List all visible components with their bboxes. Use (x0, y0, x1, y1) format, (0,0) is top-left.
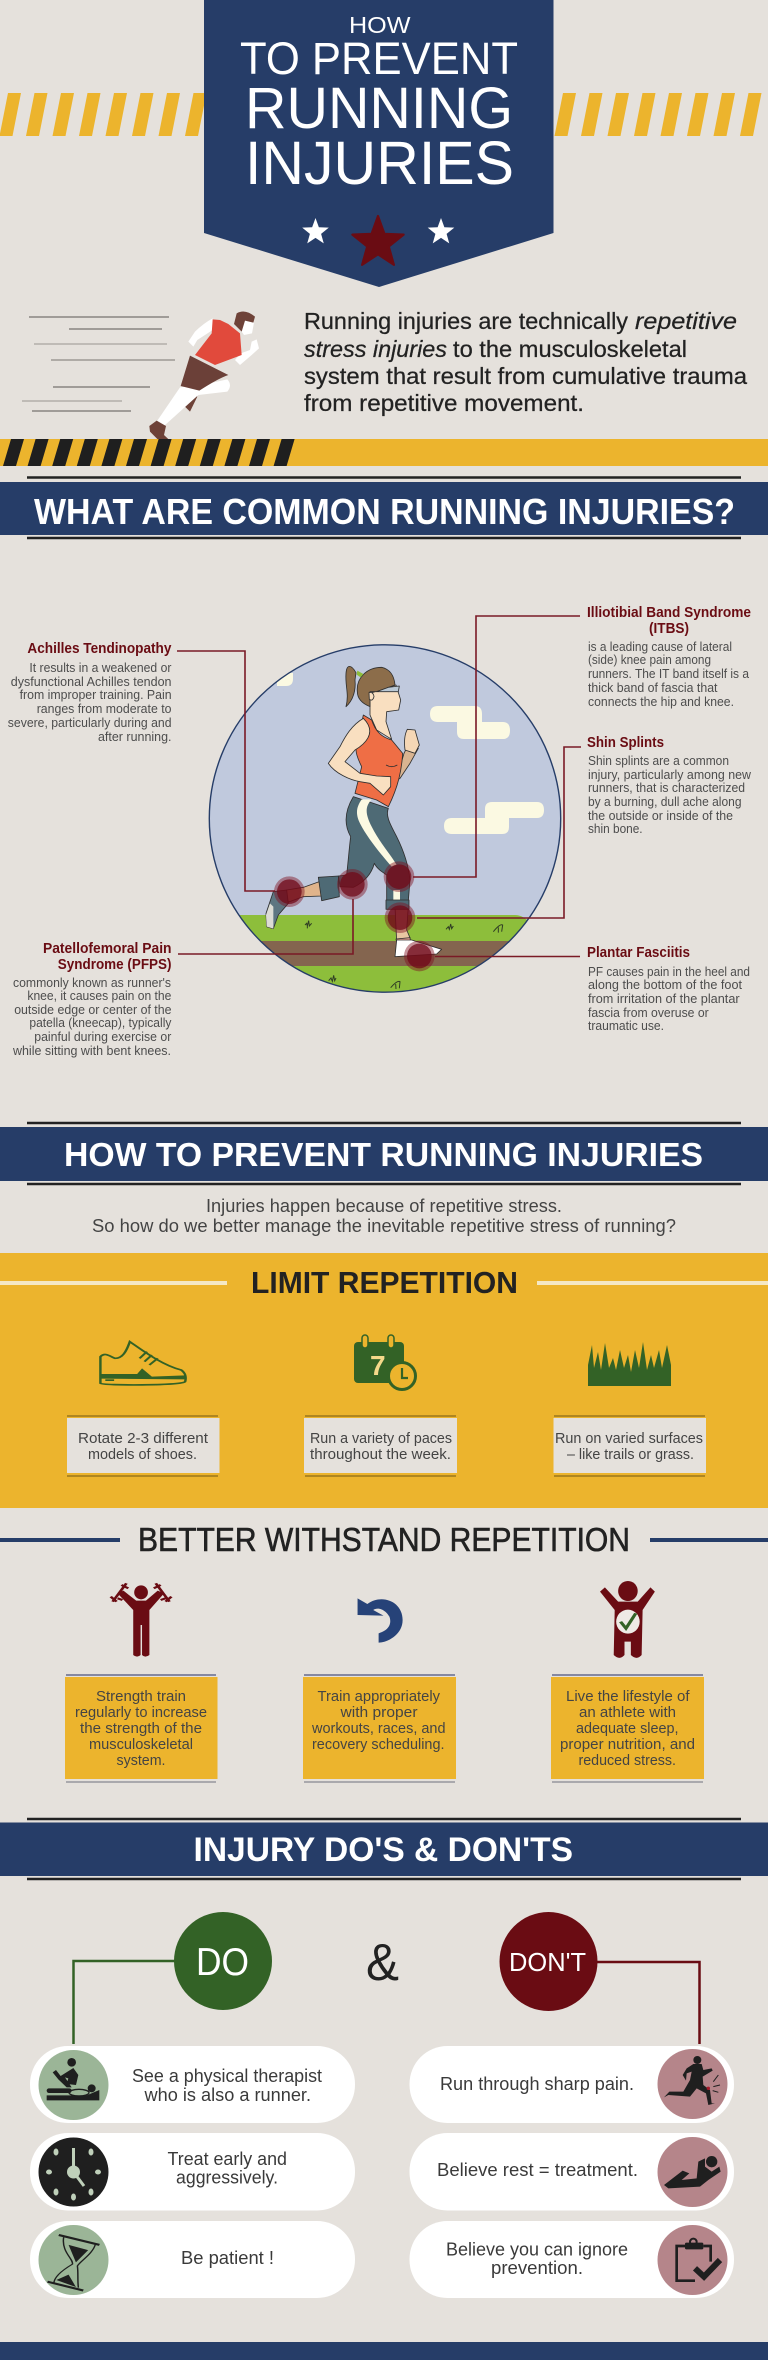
tip: vary surfaces: – like trails or grass. (567, 1446, 694, 1463)
tip: train appropriately: recovery scheduling. (312, 1736, 444, 1753)
tip: rotate shoes: Rotate 2-3 different (78, 1430, 209, 1447)
do item: treat early (30, 2133, 355, 2210)
callout: Achilles Tendinopathy: after running. (98, 730, 172, 744)
DO badge (74, 1912, 272, 2044)
icon: running shoe (100, 1342, 186, 1385)
callout: Patellofemoral Pain Syndrome: while sitting with bent knees. (12, 1044, 171, 1058)
better withstand heading: BETTER WITHSTAND REPETITION (138, 1521, 630, 1558)
tip: train appropriately: with proper (339, 1704, 418, 1721)
callout: Illiotibial Band Syndrome (413, 604, 751, 877)
tip: athlete lifestyle: an athlete with (579, 1704, 676, 1721)
icon: resting person (664, 2156, 721, 2188)
callout: Achilles Tendinopathy: ranges from moderate to (37, 702, 172, 716)
callout: Patellofemoral Pain Syndrome: outside edge or center of the (14, 1003, 172, 1017)
don't item: believe rest: Believe rest = treatment. (437, 2160, 638, 2180)
runner with speed lines (22, 311, 259, 440)
tip: athlete lifestyle: adequate sleep, (576, 1720, 678, 1737)
callout: Plantar Fasciitis: from irritation of the plantar (588, 992, 740, 1006)
tip: strength train: system. (116, 1752, 166, 1769)
callout: Achilles Tendinopathy: It results in a weakened or (29, 661, 171, 675)
title text (240, 12, 518, 197)
do item: be patient: Be patient ! (181, 2248, 274, 2268)
footer band (0, 2342, 768, 2360)
icon: person lifting dumbbells (111, 1583, 171, 1657)
callout: Illiotibial Band Syndrome: Illiotibial Band Syndrome (587, 604, 751, 621)
title text: INJURIES (245, 129, 514, 197)
callout: Achilles Tendinopathy: Achilles Tendinopathy (27, 640, 172, 657)
callout: Patellofemoral Pain Syndrome (12, 899, 353, 1058)
callout: Shin Splints (417, 734, 752, 918)
tip: vary surfaces (554, 1416, 706, 1476)
prevention intro text: So how do we better manage the inevitable repetitive stress of running? (92, 1216, 676, 1236)
panel: limit repetition (0, 1253, 768, 1508)
do item: treat early: Treat early and (168, 2149, 287, 2169)
callout: Shin Splints: the outside or inside of the (588, 809, 733, 823)
section heading: how to prevent running injuries: HOW TO PREVENT RUNNING INJURIES (64, 1136, 703, 1173)
callout: Plantar Fasciitis: Plantar Fasciitis (587, 944, 690, 961)
do item: treat early: aggressively. (176, 2168, 278, 2188)
icon: calendar with clock (354, 1335, 416, 1390)
limit repetition heading (0, 1265, 768, 1300)
callout: Patellofemoral Pain Syndrome: commonly known as runner's (13, 976, 171, 990)
title banner (204, 0, 554, 287)
callout: Patellofemoral Pain Syndrome: Syndrome (PFPS) (58, 956, 172, 973)
callout: Illiotibial Band Syndrome: thick band of fascia that (588, 681, 718, 695)
callout: Shin Splints: Shin splints are a common (588, 754, 729, 768)
tip: athlete lifestyle (551, 1675, 704, 1782)
hazard bar (0, 439, 768, 466)
DO badge: DO (196, 1941, 249, 1984)
title text: HOW (349, 12, 411, 38)
tip: strength train: musculoskeletal (89, 1736, 193, 1753)
tip: vary paces: Run a variety of paces (310, 1430, 452, 1447)
do item: be patient (30, 2221, 355, 2298)
DON'T badge: DON'T (509, 1947, 586, 1977)
prevention intro text (92, 1196, 676, 1236)
panel: better withstand repetition (0, 1521, 768, 1782)
woman figure (266, 666, 442, 957)
callout: Plantar Fasciitis: traumatic use. (588, 1019, 664, 1033)
callout: Patellofemoral Pain Syndrome: knee, it causes pain on the (27, 989, 171, 1003)
tip: train appropriately: Train appropriately (318, 1688, 440, 1705)
icon: clipboard with check (677, 2239, 720, 2281)
intro paragraph: to the musculoskeletal (453, 336, 687, 362)
callout: Illiotibial Band Syndrome: (ITBS) (649, 620, 689, 637)
callout: Patellofemoral Pain Syndrome: Patellofemoral Pain (43, 940, 172, 957)
tip: train appropriately: workouts, races, and (311, 1720, 446, 1737)
tip: strength train: the strength of the (80, 1720, 202, 1737)
don't item: ignore prevention: prevention. (491, 2258, 583, 2278)
tip: strength train: regularly to increase (75, 1704, 207, 1721)
callout: Achilles Tendinopathy: from improper training. Pain (20, 688, 172, 702)
intro paragraph: Running injuries are technically (304, 308, 629, 334)
do item: see a physical therapist: who is also a runner. (143, 2085, 311, 2105)
callout: Plantar Fasciitis (435, 944, 750, 1033)
pain points (274, 861, 435, 971)
grass tufts (305, 921, 503, 989)
don't item: ignore prevention: Believe you can ignore (446, 2240, 628, 2260)
icon: circular arrow (358, 1598, 403, 1643)
icon: hourglass (48, 2235, 99, 2290)
ampersand: & (366, 1934, 399, 1992)
callout: Shin Splints: shin bone. (588, 822, 643, 836)
don't item: ignore prevention (410, 2221, 734, 2298)
do item: see a physical therapist (30, 2046, 355, 2123)
tip: vary paces (304, 1416, 457, 1476)
tip: vary paces: throughout the week. (310, 1446, 451, 1463)
yellow hazard stripes: left (0, 93, 206, 136)
tip: rotate shoes (67, 1416, 220, 1476)
tip: vary surfaces: Run on varied surfaces (555, 1430, 703, 1447)
callout: Shin Splints: runners, that is characterized (588, 781, 745, 795)
intro paragraph (304, 308, 747, 416)
intro paragraph: from repetitive movement. (304, 390, 584, 416)
tip: train appropriately (303, 1675, 456, 1782)
title text: TO PREVENT (240, 33, 518, 84)
DON'T badge (500, 1912, 700, 2044)
illustration: woman running in a circle with pain points (200, 645, 561, 1000)
tip: strength train (65, 1675, 218, 1782)
icon: physical therapist (47, 2058, 99, 2100)
do item: see a physical therapist: See a physical therapist (132, 2066, 322, 2086)
intro paragraph: system that result from cumulative trauma (304, 363, 747, 389)
callout: Patellofemoral Pain Syndrome: patella (kneecap), typically (29, 1016, 172, 1030)
intro paragraph: repetitive (635, 308, 737, 334)
intro paragraph: stress injuries (304, 336, 447, 362)
callout: Patellofemoral Pain Syndrome: painful during exercise or (34, 1030, 171, 1044)
tip: athlete lifestyle: proper nutrition, and (560, 1736, 695, 1753)
callout: Illiotibial Band Syndrome: runners. The IT band itself is a (588, 667, 749, 681)
callout: Shin Splints: Shin Splints (587, 734, 664, 751)
callout: Plantar Fasciitis: PF causes pain in the heel and (588, 965, 750, 979)
tip: athlete lifestyle: reduced stress. (578, 1752, 676, 1769)
callout: Shin Splints: injury, particularly among new (588, 768, 752, 782)
icon: calendar with clock: 7 (370, 1350, 386, 1381)
limit repetition heading: LIMIT REPETITION (251, 1265, 518, 1300)
don't item: run through pain (410, 2046, 734, 2123)
callout: Shin Splints: by a burning, dull ache along (588, 795, 742, 809)
callout: Achilles Tendinopathy: dysfunctional Achilles tendon (11, 675, 172, 689)
callout: Illiotibial Band Syndrome: is a leading cause of lateral (588, 640, 732, 654)
banner stars (302, 216, 454, 265)
section heading: injury do's and don'ts: INJURY DO'S & DON'TS (194, 1831, 573, 1869)
callout: Plantar Fasciitis: fascia from overuse or (588, 1006, 709, 1020)
callout: Achilles Tendinopathy (8, 640, 275, 891)
prevention intro text: Injuries happen because of repetitive stress. (206, 1196, 562, 1216)
don't item: run through pain: Run through sharp pain. (440, 2074, 634, 2094)
icon: grass (588, 1342, 671, 1386)
icon: runner with knee pain (664, 2056, 720, 2105)
tip: rotate shoes: models of shoes. (88, 1446, 197, 1463)
callout: Achilles Tendinopathy: severe, particularly during and (8, 716, 172, 730)
yellow hazard stripes: right (554, 93, 762, 136)
title text: RUNNING (245, 76, 513, 141)
callout: Illiotibial Band Syndrome: connects the hip and knee. (588, 695, 734, 709)
section heading: what are common running injuries: WHAT ARE COMMON RUNNING INJURIES? (34, 491, 735, 532)
tip: athlete lifestyle: Live the lifestyle of (566, 1688, 690, 1705)
callout: Plantar Fasciitis: along the bottom of the foot (588, 978, 743, 992)
section heading: injury do's and don'ts (0, 1822, 768, 1876)
tip: strength train: Strength train (96, 1688, 186, 1705)
section heading: how to prevent running injuries (0, 1127, 768, 1181)
don't item: believe rest (410, 2133, 734, 2210)
callout: Illiotibial Band Syndrome: (side) knee pain among (588, 653, 711, 667)
icon: healthy person with check (600, 1581, 655, 1658)
icon: clock (46, 2148, 100, 2200)
